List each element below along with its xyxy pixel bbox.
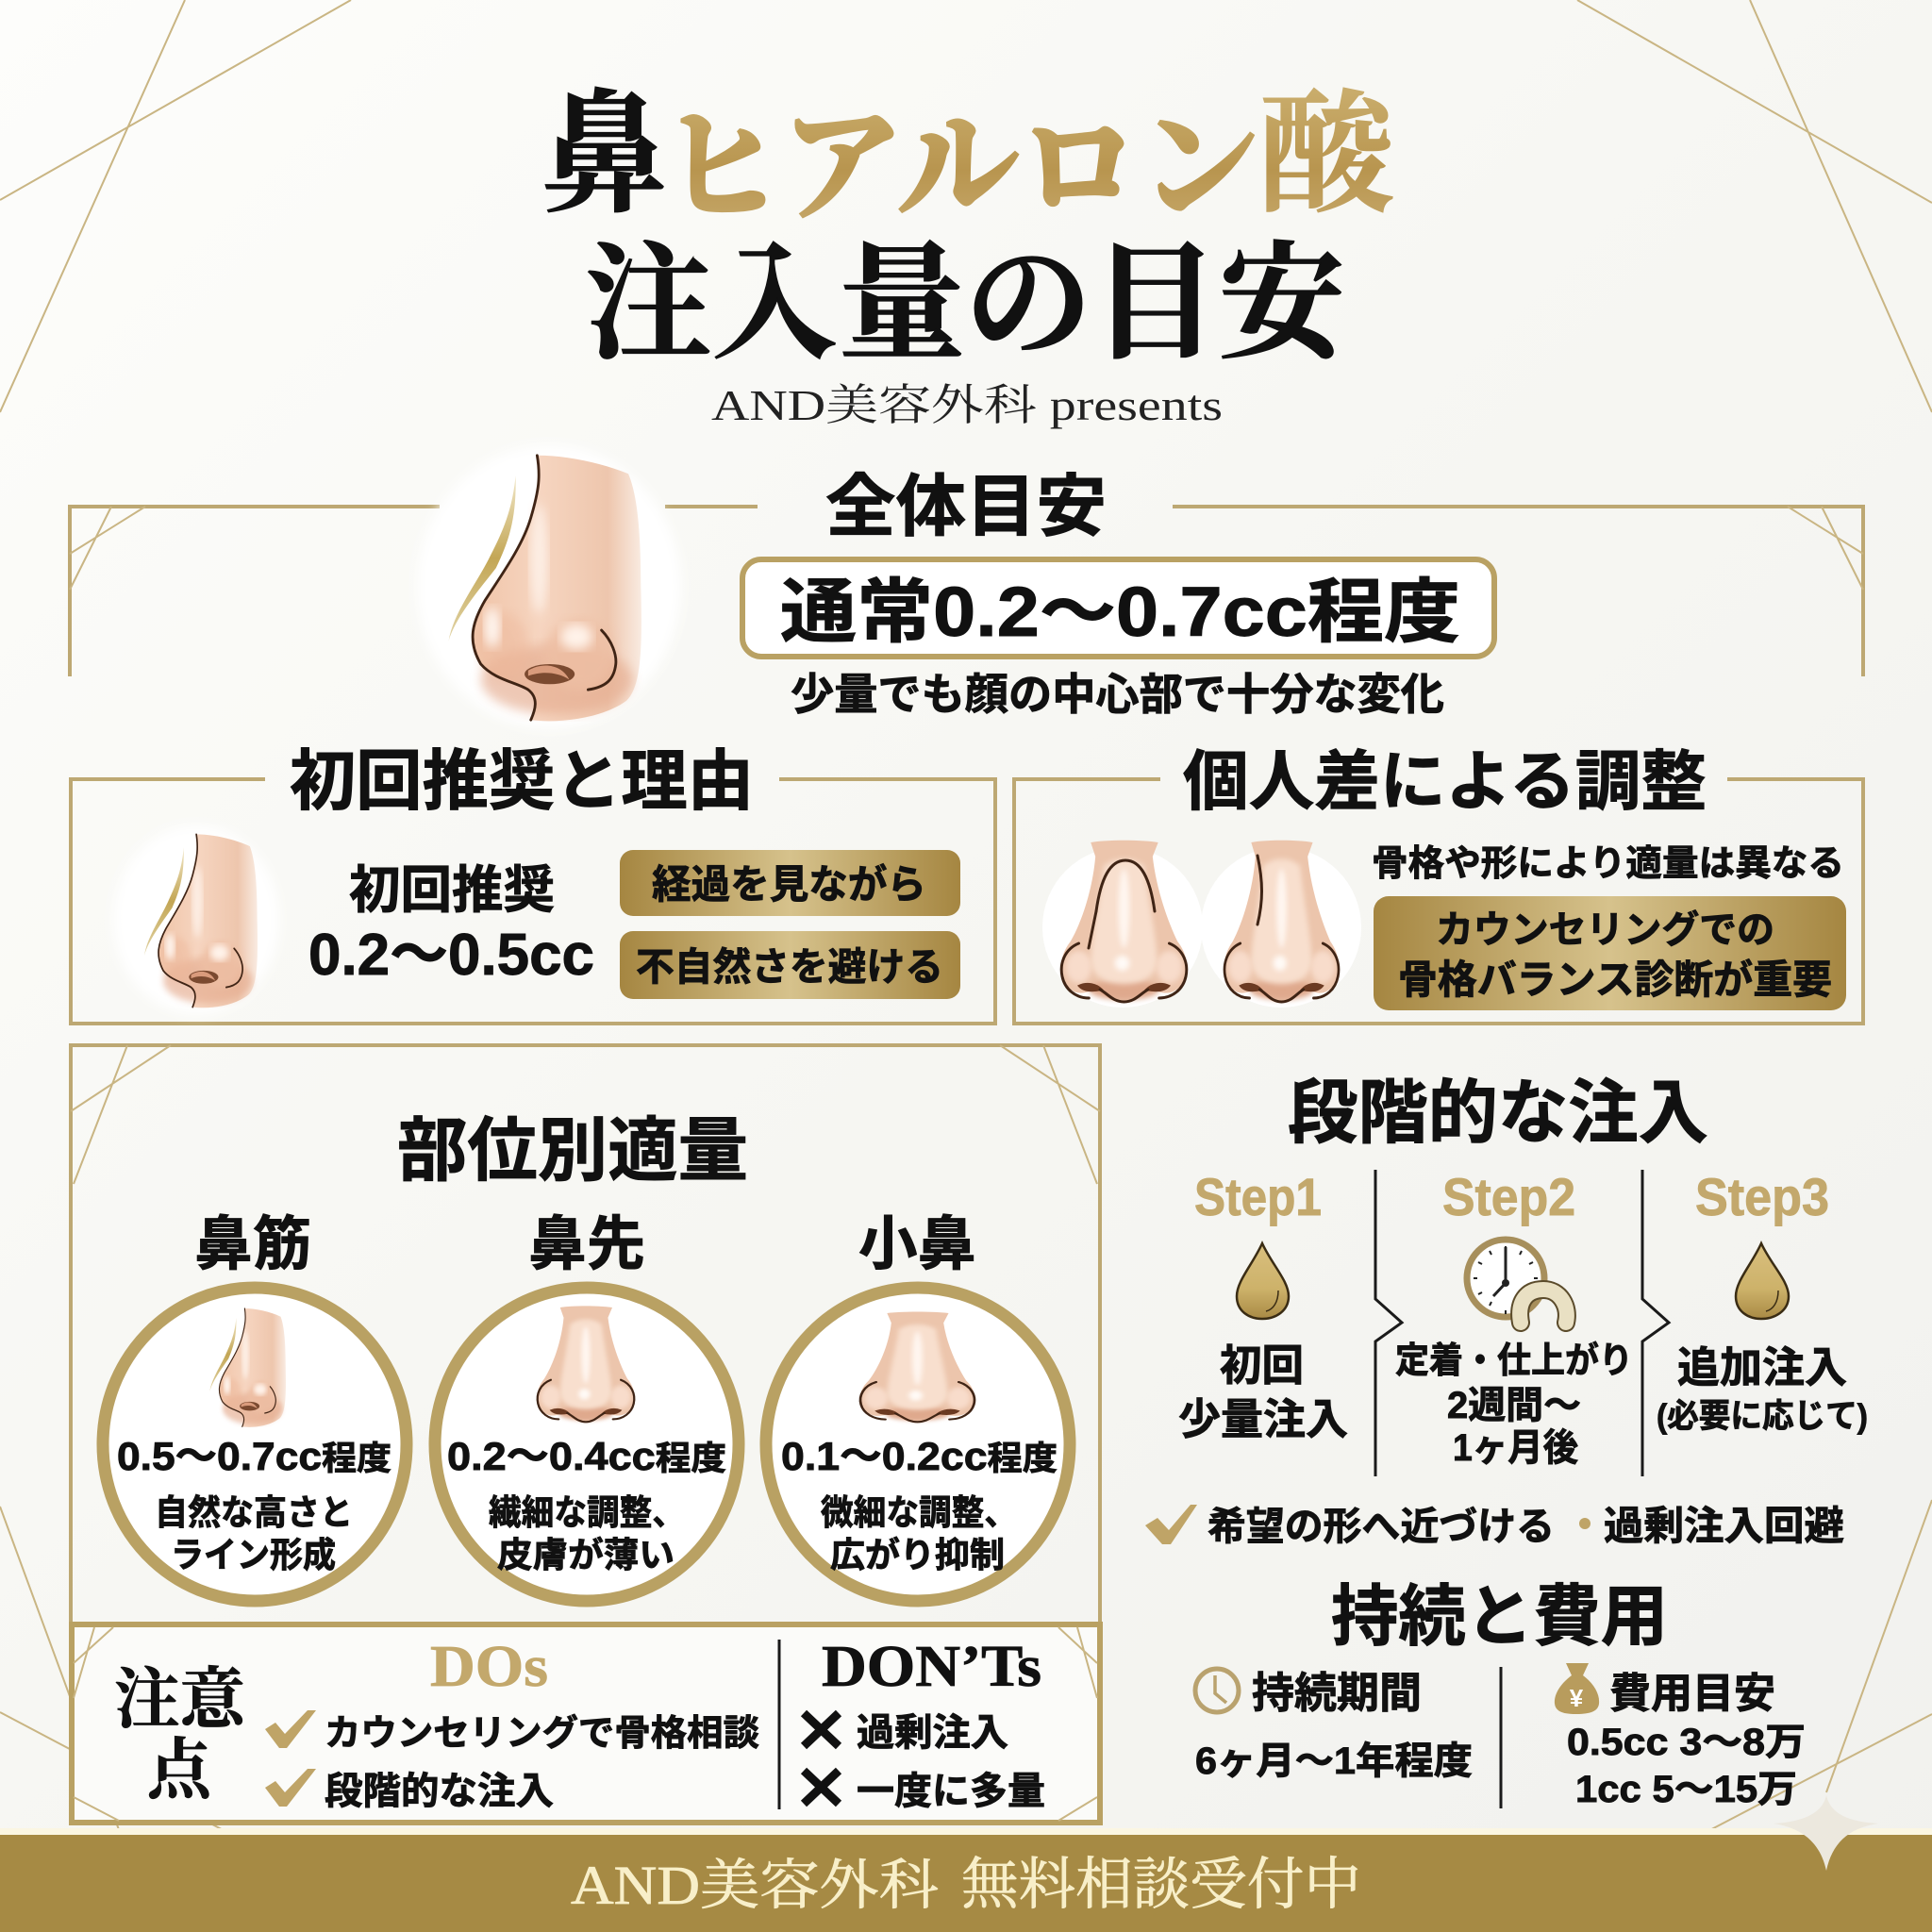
DOs list <box>265 1635 759 1812</box>
column: nasal tip: 繊細な調整、 <box>489 1493 685 1532</box>
pill: watch progress: 経過を見ながら <box>652 862 926 907</box>
icon: drop <box>1736 1243 1789 1319</box>
heading: first time recommendation: 初回推奨と理由 <box>290 744 754 818</box>
pill: counseling: カウンセリングでの <box>1436 909 1774 951</box>
heading: cautions <box>114 1664 249 1807</box>
amount note: 少量でも顔の中心部で十分な変化 <box>791 670 1444 719</box>
heading: cautions: 点 <box>147 1735 215 1807</box>
step 1: Step1 <box>1194 1167 1322 1226</box>
pill: watch progress <box>620 850 960 916</box>
staged injection benefits <box>1145 1504 1844 1548</box>
step 1: 少量注入 <box>1178 1395 1348 1443</box>
panel: overall guide <box>70 445 1863 728</box>
footer banner: AND美容外科 <box>571 1855 939 1916</box>
DON'Ts list <box>804 1635 1045 1812</box>
icon: clock and arch <box>1467 1240 1567 1323</box>
staged injection benefits: 希望の形へ近づける <box>1208 1505 1555 1548</box>
duration: 6ヶ月〜1年程度 <box>1195 1740 1473 1782</box>
icon: check <box>1145 1505 1197 1544</box>
step 1: 初回 <box>1220 1341 1304 1390</box>
panel: individual adjustment <box>1014 745 1863 1024</box>
subtitle: AND美容外科 presents <box>711 381 1223 429</box>
pill: counseling <box>1374 896 1846 1010</box>
pill: avoid unnatural <box>620 931 960 999</box>
heading: staged injection: 段階的な注入 <box>1288 1074 1708 1152</box>
icon: drop <box>1237 1243 1289 1319</box>
step 3 <box>1657 1167 1868 1435</box>
column: nasal bridge: 自然な高さと <box>155 1493 353 1532</box>
sparkle <box>1774 1795 1878 1871</box>
step 2: 定着・仕上がり <box>1395 1341 1633 1381</box>
DON'Ts list: 過剰注入 <box>857 1712 1008 1754</box>
cost: 費用目安 <box>1609 1671 1775 1717</box>
column: nasal tip: 鼻先 <box>528 1212 645 1277</box>
column: nostrils: 広がり抑制 <box>830 1536 1005 1574</box>
step 3: 追加注入 <box>1677 1343 1847 1391</box>
column: nasal tip <box>435 1212 739 1601</box>
DON'Ts list: 一度に多量 <box>857 1771 1045 1812</box>
column: nasal bridge <box>103 1212 407 1601</box>
pill: counseling: 骨格バランス診断が重要 <box>1398 958 1832 1002</box>
icon: cross <box>804 1771 839 1804</box>
heading: cautions: 注意 <box>114 1664 249 1737</box>
icon: small side nose <box>113 825 279 1014</box>
recommended amount: 0.2〜0.5cc <box>308 923 594 988</box>
heading: overall guide: 全体目安 <box>825 470 1107 545</box>
duration <box>1195 1669 1473 1782</box>
DOs list: 段階的な注入 <box>325 1771 554 1812</box>
pill: avoid unnatural: 不自然さを避ける <box>636 945 943 989</box>
column: nostrils: 微細な調整、 <box>821 1493 1017 1532</box>
heading: amount by area: 部位別適量 <box>397 1111 748 1190</box>
highlighted amount box: 通常0.2〜0.7cc程度 <box>780 573 1460 651</box>
icon: cross <box>804 1713 839 1746</box>
title: 酸 <box>1259 83 1399 229</box>
column: nasal bridge: 鼻筋 <box>194 1212 311 1277</box>
cost: 0.5cc 3〜8万 <box>1567 1722 1806 1763</box>
footer banner: 無料相談受付中 <box>961 1854 1361 1916</box>
column: nasal bridge: ライン形成 <box>171 1536 336 1574</box>
icon: clock <box>1195 1669 1239 1712</box>
icon: money bag <box>1555 1663 1599 1714</box>
recommended amount <box>308 862 594 988</box>
column: nasal tip: 皮膚が薄い <box>497 1536 675 1574</box>
step 2 <box>1395 1167 1633 1469</box>
icon: front nose with side lines <box>1201 841 1361 1008</box>
DON'Ts list: DON’Ts <box>822 1635 1041 1699</box>
adjustment note: 骨格や形により適量は異なる <box>1372 844 1844 884</box>
staged injection benefits: 過剰注入回避 <box>1604 1504 1844 1548</box>
icon: check <box>265 1769 316 1807</box>
heading: duration and cost: 持続と費用 <box>1331 1580 1668 1655</box>
icon: money bag: ¥ <box>1570 1684 1584 1712</box>
panel: cautions <box>72 1624 1100 1823</box>
duration: 持続期間 <box>1252 1669 1422 1717</box>
icon: check <box>265 1710 316 1748</box>
title: ヒアルロン <box>661 98 1259 237</box>
step 3: (必要に応じて) <box>1657 1398 1868 1435</box>
step 2: Step2 <box>1442 1167 1575 1226</box>
panel: first time recommendation <box>71 744 995 1024</box>
heading: individual adjustment: 個人差による調整 <box>1183 745 1707 818</box>
DOs list: DOs <box>430 1635 548 1699</box>
cost: 1cc 5〜15万 <box>1575 1769 1797 1810</box>
step 1 <box>1178 1167 1348 1443</box>
panel: amount by area <box>71 1045 1100 1623</box>
column: nostrils: 小鼻 <box>858 1212 976 1277</box>
step 2: 1ヶ月後 <box>1453 1427 1578 1469</box>
step 3: Step3 <box>1695 1167 1829 1226</box>
panel: duration and cost <box>1195 1580 1806 1810</box>
cost <box>1555 1663 1806 1810</box>
title: 鼻 <box>541 83 668 229</box>
footer banner <box>0 1828 1932 1932</box>
title <box>541 83 1399 375</box>
DOs list: カウンセリングで骨格相談 <box>325 1714 759 1754</box>
recommended amount: 初回推奨 <box>349 862 555 919</box>
column: nostrils: 0.1〜0.2cc 程度 <box>781 1434 1058 1478</box>
step 2: 2週間〜 <box>1447 1385 1581 1426</box>
column: nasal bridge: 0.5〜0.7cc 程度 <box>117 1434 391 1478</box>
icon: front nose with outline <box>1042 841 1203 1008</box>
panel: staged injection <box>1145 1074 1868 1548</box>
column: nostrils <box>766 1212 1070 1601</box>
icon: large side nose <box>417 445 681 728</box>
column: nasal tip: 0.2〜0.4cc 程度 <box>447 1434 726 1478</box>
title: 注入量の目安 <box>585 235 1345 375</box>
highlighted amount box <box>742 559 1494 657</box>
